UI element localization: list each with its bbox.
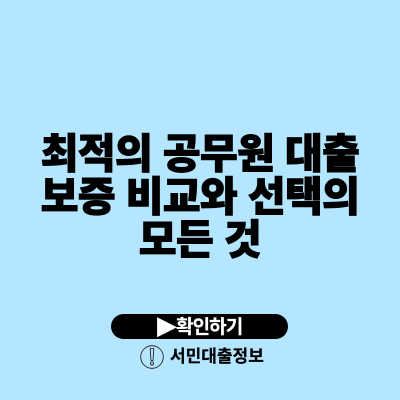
title: 최적의 공무원 대출 — [41, 131, 359, 177]
title — [41, 131, 359, 263]
icon: exclamation circle — [140, 345, 164, 369]
title: 보증 비교와 선택의 — [41, 174, 359, 220]
brand label: 서민대출정보 — [170, 347, 264, 366]
button play glyph: ▶ — [157, 311, 177, 341]
title: 모든 것 — [139, 217, 261, 263]
button label: 확인하기 — [176, 317, 242, 338]
button: confirm — [111, 314, 288, 339]
